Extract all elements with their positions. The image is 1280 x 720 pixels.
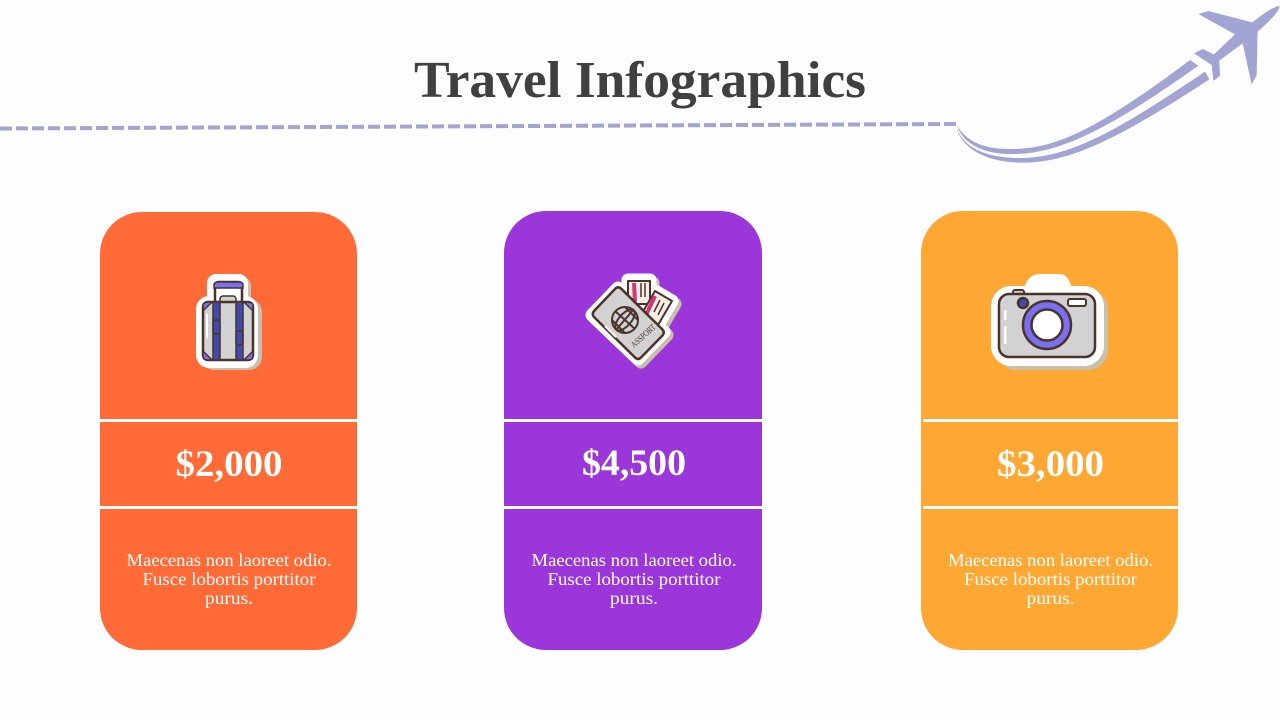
description text: [948, 550, 1153, 608]
description text: Fusce lobortis porttitor: [964, 569, 1137, 589]
description text: Maecenas non laoreet odio.: [126, 550, 332, 570]
ticket: back: [628, 281, 650, 304]
icon: passport and tickets: [592, 280, 675, 362]
description text: Maecenas non laoreet odio.: [948, 550, 1153, 570]
dashed flight path: [0, 124, 956, 128]
ticket: front: [641, 291, 672, 325]
description text: [126, 550, 332, 608]
price: $3,000: $3,000: [997, 444, 1104, 485]
description text: Maecenas non laoreet odio.: [532, 550, 736, 570]
icon: airplane with trails: [957, 6, 1279, 163]
description text: [532, 550, 736, 608]
price: $2,000: $2,000: [176, 444, 282, 485]
description text: purus.: [610, 588, 658, 608]
panel: luggage card: [100, 212, 357, 650]
passport booklet: [593, 287, 664, 359]
icon: passport and tickets: ASSPORT: [629, 322, 658, 349]
price: $4,500: $4,500: [582, 443, 686, 484]
icon: suitcase: [196, 274, 262, 370]
panel: camera card: [921, 211, 1178, 650]
description text: purus.: [205, 588, 253, 608]
description text: Fusce lobortis porttitor: [142, 569, 316, 589]
icon: camera: [991, 274, 1108, 370]
title: Travel Infographics: [414, 52, 866, 109]
description text: purus.: [1026, 588, 1074, 608]
description text: Fusce lobortis porttitor: [548, 569, 721, 589]
panel: passport card: [504, 211, 762, 650]
